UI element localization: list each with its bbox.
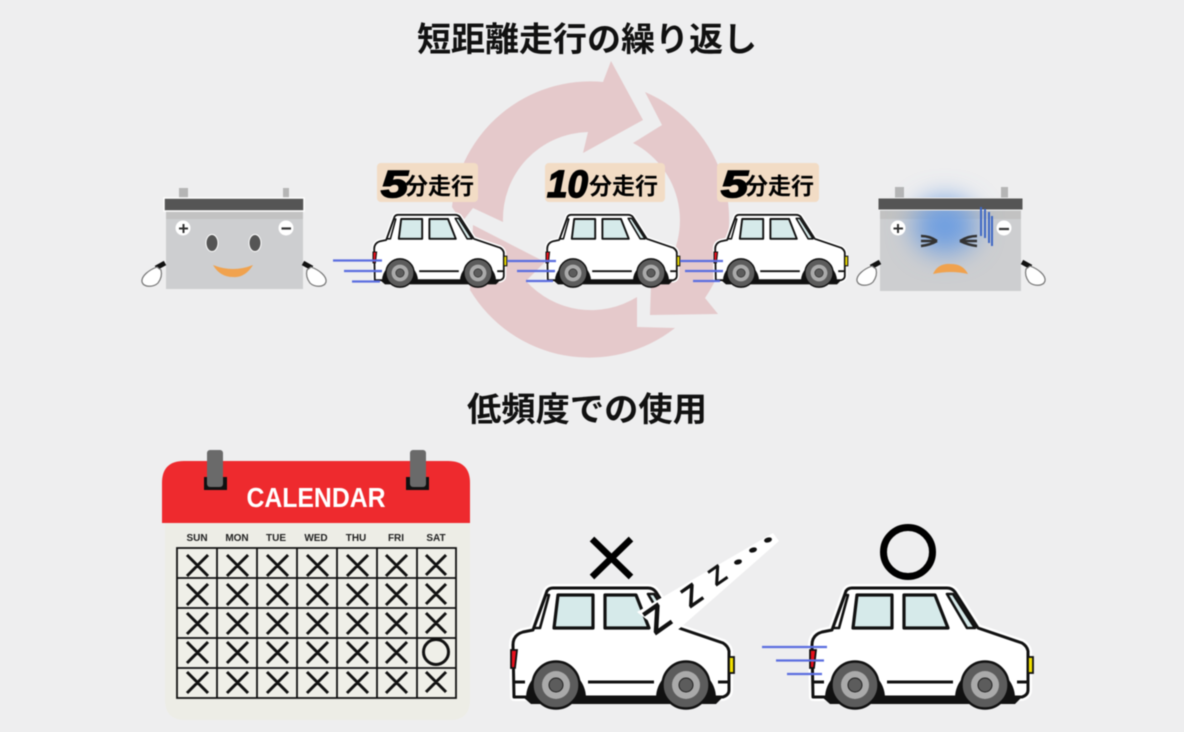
sleep beam with zzz: Z [702, 558, 733, 592]
car 1 with speed lines [333, 215, 507, 287]
moving car with speed lines [762, 588, 1033, 708]
happy battery [142, 188, 326, 289]
label: 10 minute drive: 分走行 [589, 173, 658, 199]
sleep beam with zzz [636, 533, 779, 643]
car 3 with speed lines [680, 215, 848, 287]
cycle arrows [452, 61, 729, 358]
sad battery [857, 187, 1045, 291]
sleep beam with zzz: Z [675, 577, 709, 615]
heading: low frequency use: 低頻度での使用 [467, 392, 707, 429]
weekday labels: TUE [266, 533, 286, 544]
sleep beam with zzz: Z [636, 596, 679, 643]
date grid [177, 548, 456, 698]
calendar page [165, 520, 470, 720]
label: 5 minute drive: 5 [381, 164, 409, 206]
label: 5 minute drive [717, 163, 819, 206]
car 2 with speed lines [507, 215, 680, 287]
label: 5 minute drive: 分走行 [405, 173, 474, 199]
weekday labels: THU [346, 533, 366, 544]
right ring [406, 450, 429, 490]
label: 10 minute drive [545, 163, 665, 206]
left ring [204, 450, 227, 490]
label: 5 minute drive: 分走行 [745, 173, 814, 199]
label: 5 minute drive: 5 [721, 164, 749, 206]
weekday labels: MON [225, 533, 249, 544]
calendar header [162, 461, 470, 523]
label: 5 minute drive [377, 163, 478, 206]
weekday labels: WED [304, 533, 328, 544]
weekday labels: SUN [186, 533, 208, 544]
title: repeated short trips: 短距離走行の繰り返し [417, 22, 757, 59]
circled day [424, 640, 448, 664]
weekday labels [186, 533, 446, 544]
weekday labels: FRI [388, 533, 404, 544]
crosses [187, 555, 446, 693]
circle mark [884, 528, 932, 576]
calendar [162, 450, 470, 720]
label: 10 minute drive: 10 [547, 164, 588, 206]
cross mark [592, 539, 631, 577]
calendar word: CALENDAR [246, 482, 386, 513]
sleeping car [511, 588, 734, 708]
weekday labels: SAT [426, 533, 446, 544]
